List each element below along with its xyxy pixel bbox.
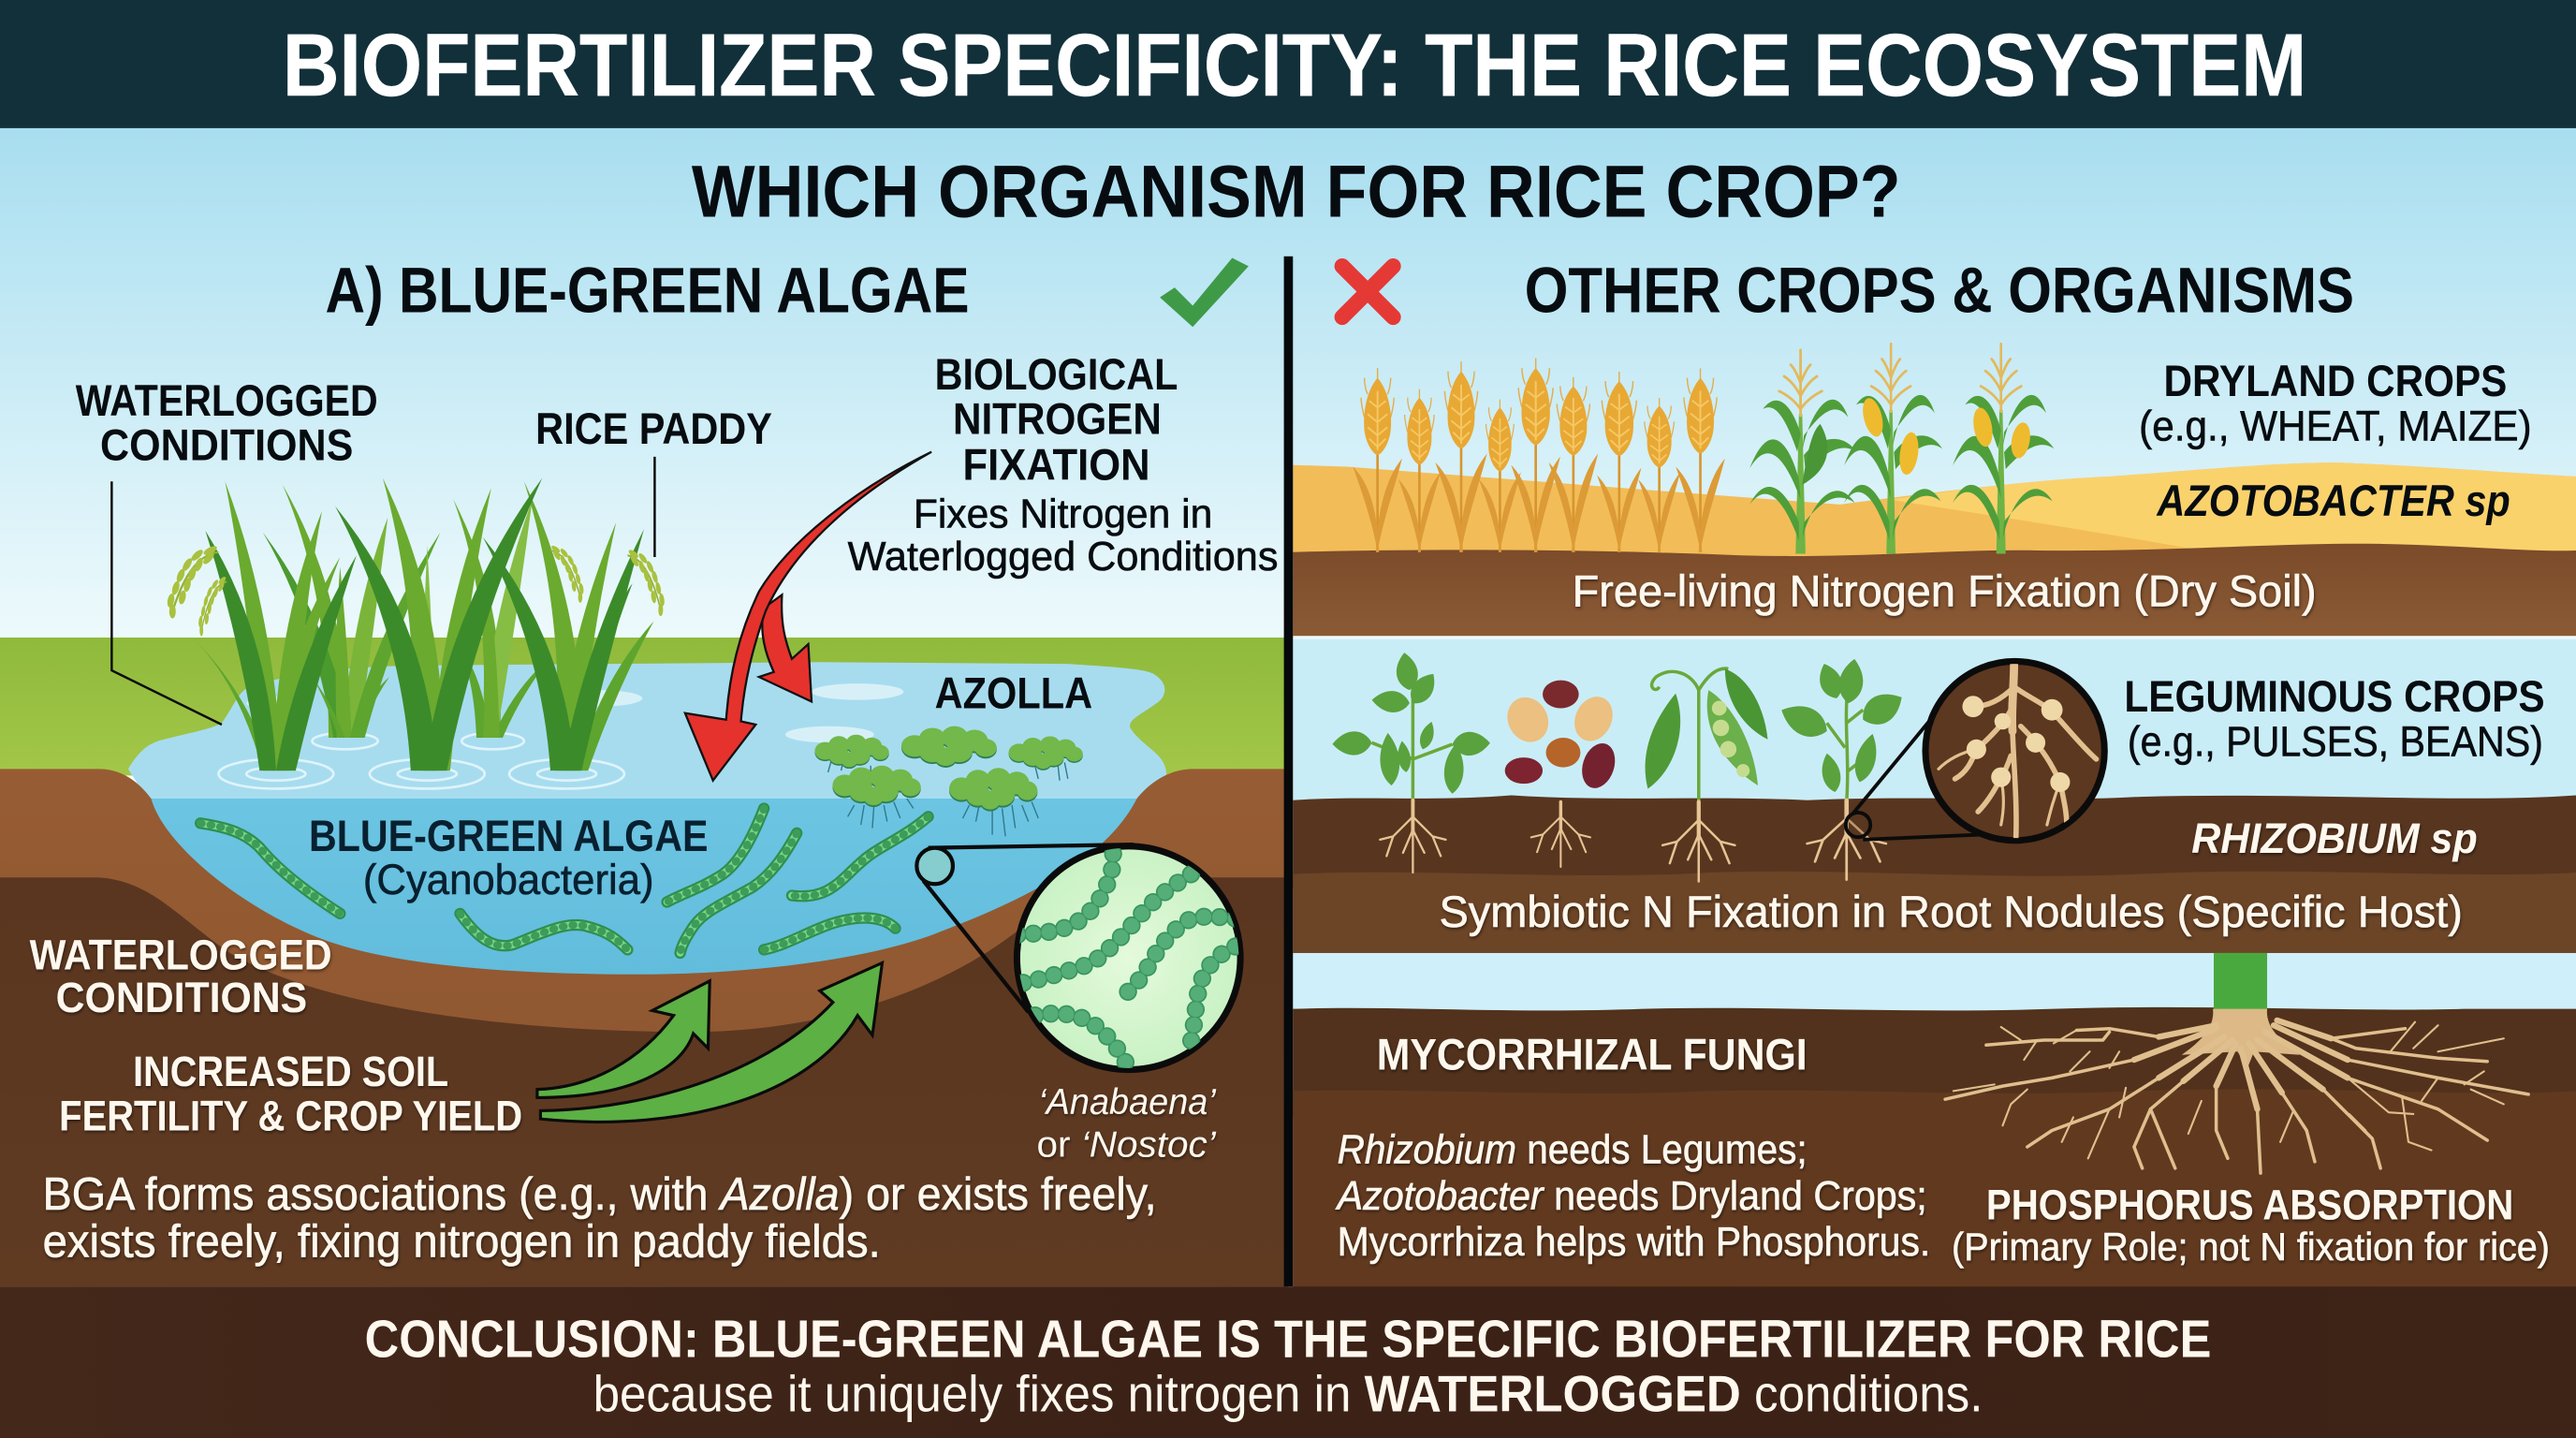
label: dryland crops: (e.g., WHEAT, MAIZE) <box>2139 402 2532 449</box>
label: leguminous crops: (e.g., PULSES, BEANS) <box>2128 717 2543 765</box>
white labels on soil, right <box>1335 814 2550 1269</box>
rice panicles <box>167 544 666 636</box>
label: anabaena or nostoc: or ‘Nostoc’ <box>1036 1125 1217 1166</box>
label: waterlogged conditions (soil): CONDITIONS <box>56 974 307 1021</box>
leader line: waterlogged conditions <box>111 481 222 725</box>
label: azotobacter sp: AZOTOBACTER sp <box>2157 477 2510 526</box>
callout: biological nitrogen fixation: NITROGEN <box>953 394 1162 444</box>
upper fungi soil <box>1293 1007 2576 1117</box>
soybean plant <box>1332 652 1490 873</box>
label: phosphorus absorption: (Primary Role; not N fixation for rice) <box>1952 1225 2550 1269</box>
text block: BGA associations: BGA forms associations (e.g., with Azolla) or exists freely, <box>43 1169 1157 1220</box>
beans <box>1500 681 1620 867</box>
label: mycorrhizal fungi: MYCORRHIZAL FUNGI <box>1377 1031 1808 1080</box>
heading: blue-green algae: A) BLUE-GREEN ALGAE <box>326 254 970 326</box>
text block: BGA associations <box>43 1169 1157 1268</box>
subtitle question: WHICH ORGANISM FOR RICE CROP? <box>692 151 1901 233</box>
maize plants <box>1749 344 2054 553</box>
text block: organism needs: Rhizobium needs Legumes; <box>1338 1127 1808 1173</box>
label: waterlogged conditions (sky) <box>76 376 378 470</box>
label: phosphorus absorption <box>1952 1181 2550 1269</box>
legume sky band <box>1293 639 2576 803</box>
conclusion text: because it uniquely fixes nitrogen in WATERLOGGED conditions. <box>593 1366 1983 1423</box>
label: increased soil fertility: INCREASED SOIL <box>133 1048 448 1095</box>
text block: organism needs <box>1335 1127 1930 1265</box>
right rice clump <box>483 481 654 770</box>
white labels on soil, left <box>30 932 1217 1268</box>
brown soil band <box>1293 544 2576 638</box>
wheat plants <box>1353 359 1725 552</box>
center divider <box>1284 257 1293 1286</box>
callout: biological nitrogen fixation: FIXATION <box>962 440 1150 490</box>
label: free-living nitrogen fixation: Free-living Nitrogen Fixation (Dry Soil) <box>1573 567 2317 617</box>
water reflections <box>246 683 903 742</box>
soil banks and rim <box>0 769 1288 1286</box>
azolla clusters <box>814 726 1083 836</box>
label: blue-green algae (cyanobacteria) <box>309 812 708 903</box>
title: BIOFERTILIZER SPECIFICITY: THE RICE ECOSYSTEM <box>283 16 2306 115</box>
panel: leguminous crops <box>1293 639 2576 955</box>
root soil lower layer <box>1293 872 2576 955</box>
icon: green check mark <box>1160 258 1249 327</box>
red arrows: nitrogen fixation <box>685 452 931 781</box>
callout: biological nitrogen fixation: Fixes Nitrogen in <box>914 491 1212 536</box>
separator line between crop bands <box>1293 636 2576 639</box>
callout: biological nitrogen fixation: Waterlogged Conditions <box>848 534 1278 580</box>
cyanobacteria filaments <box>200 809 929 953</box>
bean plant with nodules <box>1776 657 1909 880</box>
branching roots <box>1945 1009 2528 1173</box>
magnifier: root nodules <box>1846 657 2104 842</box>
text block: organism needs: Mycorrhiza helps with Phosphorus. <box>1338 1219 1930 1265</box>
rear rice clumps <box>263 485 550 738</box>
mycorrhiza sky band <box>1293 953 2576 1016</box>
leader line: rice paddy <box>653 457 655 557</box>
ground: grass strip <box>0 638 1288 775</box>
conclusion text <box>365 1310 2211 1423</box>
label: leguminous crops <box>2124 672 2545 765</box>
label: dryland crops: DRYLAND CROPS <box>2163 357 2507 406</box>
label: phosphorus absorption: PHOSPHORUS ABSORPTION <box>1986 1181 2513 1228</box>
conclusion text: CONCLUSION: BLUE-GREEN ALGAE IS THE SPECIFIC BIOFERTILIZER FOR RICE <box>365 1310 2211 1369</box>
panel: dryland crops <box>1293 344 2576 638</box>
callout: biological nitrogen fixation: BIOLOGICAL <box>935 350 1178 400</box>
label: waterlogged conditions (sky): WATERLOGGED <box>76 376 378 426</box>
sand hills <box>1293 462 2576 559</box>
deep water bowl <box>151 799 1137 975</box>
ripples around rice <box>218 733 624 788</box>
label: blue-green algae (cyanobacteria): BLUE-GREEN ALGAE <box>309 812 708 861</box>
label: waterlogged conditions (soil) <box>30 932 332 1021</box>
label: waterlogged conditions (soil): WATERLOGGED <box>30 932 332 979</box>
left rice clump <box>192 481 357 770</box>
lower fungi soil <box>1293 1089 2576 1288</box>
label: anabaena or nostoc <box>1036 1082 1217 1166</box>
background: sky <box>0 128 2576 640</box>
label: blue-green algae (cyanobacteria): (Cyanobacteria) <box>363 856 654 903</box>
footer: conclusion bar <box>0 1286 2576 1438</box>
pond surface <box>128 662 1166 805</box>
lower dark soil layer <box>0 877 1288 1286</box>
label: increased soil fertility: FERTILITY & CROP YIELD <box>59 1093 522 1140</box>
text block: organism needs: Azotobacter needs Dryland Crops; <box>1335 1173 1927 1219</box>
label: rice paddy: RICE PADDY <box>535 404 772 454</box>
label: waterlogged conditions (sky): CONDITIONS <box>100 420 353 470</box>
green arrows: soil fertility <box>537 962 882 1122</box>
callout: biological nitrogen fixation <box>848 350 1278 580</box>
icon: red cross <box>1342 266 1393 317</box>
root soil upper layer <box>1293 795 2576 888</box>
text block: BGA associations: exists freely, fixing nitrogen in paddy fields. <box>43 1217 881 1268</box>
label: anabaena or nostoc: ‘Anabaena’ <box>1038 1082 1217 1123</box>
label: rhizobium sp: RHIZOBIUM sp <box>2191 814 2478 862</box>
magnifier: anabaena close-up <box>916 838 1240 1070</box>
centre rice clump <box>335 478 542 770</box>
label: increased soil fertility <box>59 1048 522 1140</box>
plant stem <box>2214 953 2267 1010</box>
label: dryland crops <box>2139 357 2532 449</box>
panel: mycorrhizal fungi <box>1293 953 2576 1288</box>
heading: other crops and organisms: OTHER CROPS & ORGANISMS <box>1525 254 2354 326</box>
panel: blue-green algae rice paddy scene <box>0 452 1288 1286</box>
pea plant <box>1646 668 1767 881</box>
header bar <box>0 0 2576 128</box>
rice plants <box>167 478 666 770</box>
label: azolla: AZOLLA <box>935 668 1092 718</box>
label: symbiotic fixation: Symbiotic N Fixation in Root Nodules (Specific Host) <box>1439 888 2463 937</box>
